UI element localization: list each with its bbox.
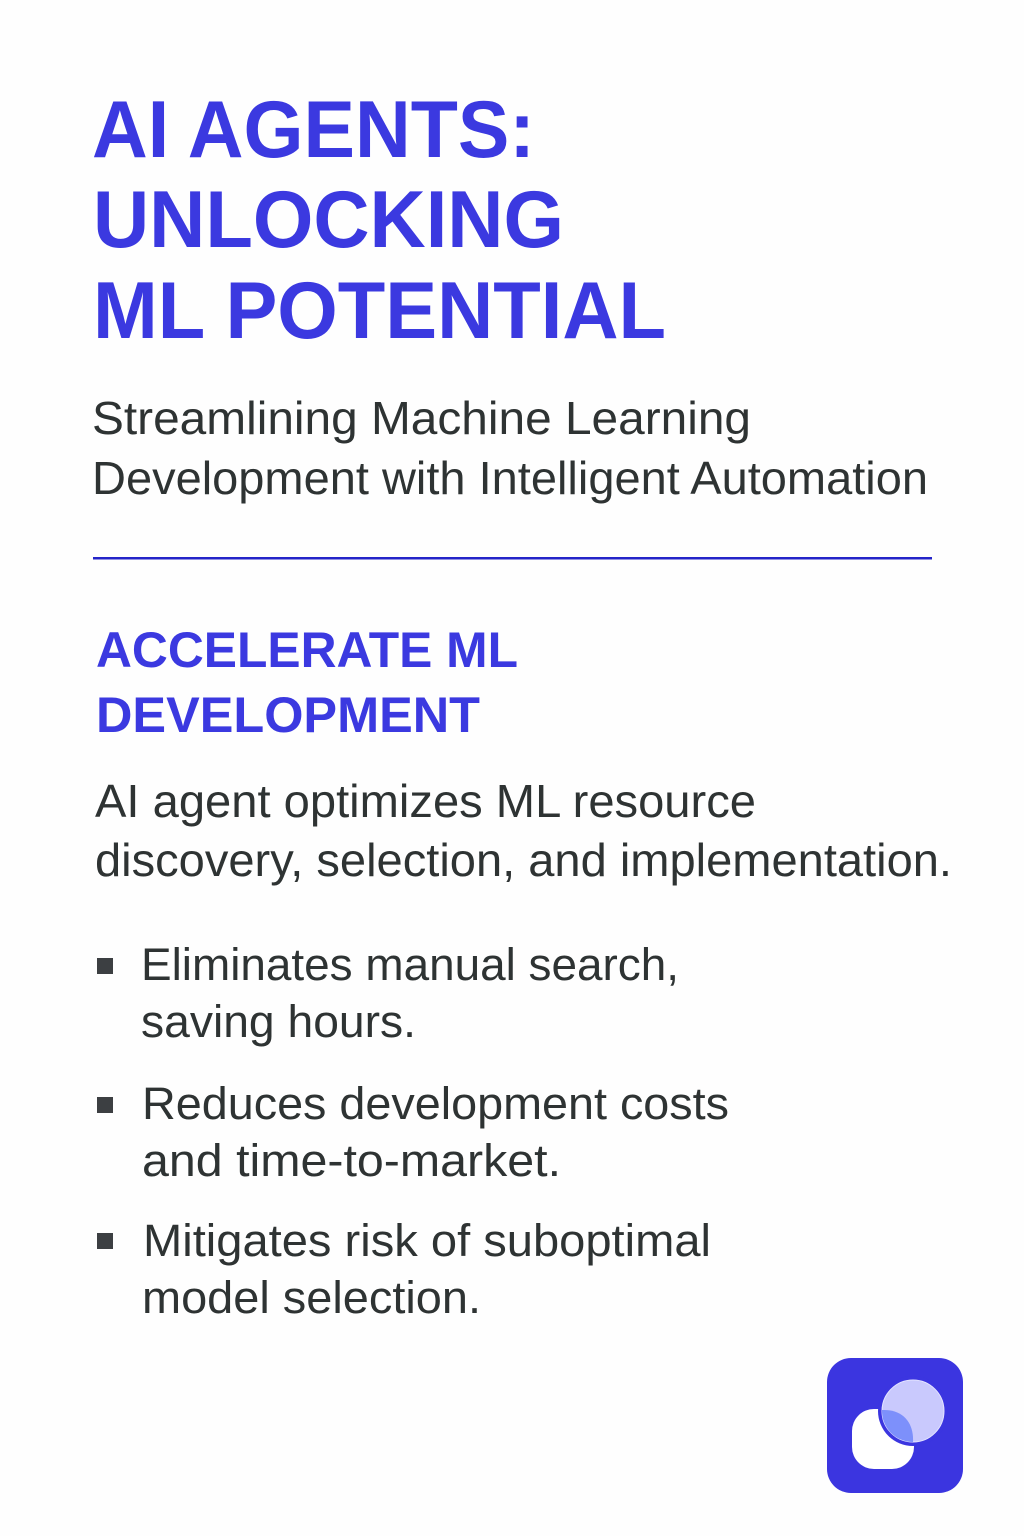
section heading <box>96 622 518 743</box>
bullet: reduces development costs: and time-to-market. <box>142 1135 561 1186</box>
section heading: DEVELOPMENT <box>96 687 480 743</box>
section description: discovery, selection, and implementation. <box>95 834 952 886</box>
section description: AI agent optimizes ML resource <box>95 775 756 827</box>
bullet list <box>97 939 729 1323</box>
title: ML POTENTIAL <box>93 266 666 356</box>
bullet: mitigates risk: Mitigates risk of suboptimal <box>143 1215 711 1266</box>
title <box>92 85 666 356</box>
bullet: reduces development costs: Reduces development costs <box>142 1078 729 1129</box>
section description <box>95 775 952 886</box>
bullet: mitigates risk <box>97 1215 711 1323</box>
bullet: eliminates manual search: Eliminates manual search, <box>141 939 679 990</box>
subtitle <box>92 392 928 504</box>
subtitle: Development with Intelligent Automation <box>92 452 928 504</box>
section heading: ACCELERATE ML <box>96 622 518 678</box>
icon: overlapping shapes logo <box>827 1358 963 1493</box>
title: UNLOCKING <box>93 175 564 265</box>
bullet: reduces development costs <box>97 1078 729 1186</box>
subtitle: Streamlining Machine Learning <box>92 392 751 444</box>
title: AI AGENTS: <box>92 85 535 175</box>
bullet: eliminates manual search <box>97 939 679 1047</box>
bullet: mitigates risk: model selection. <box>142 1272 481 1323</box>
bullet: eliminates manual search: saving hours. <box>141 996 416 1047</box>
